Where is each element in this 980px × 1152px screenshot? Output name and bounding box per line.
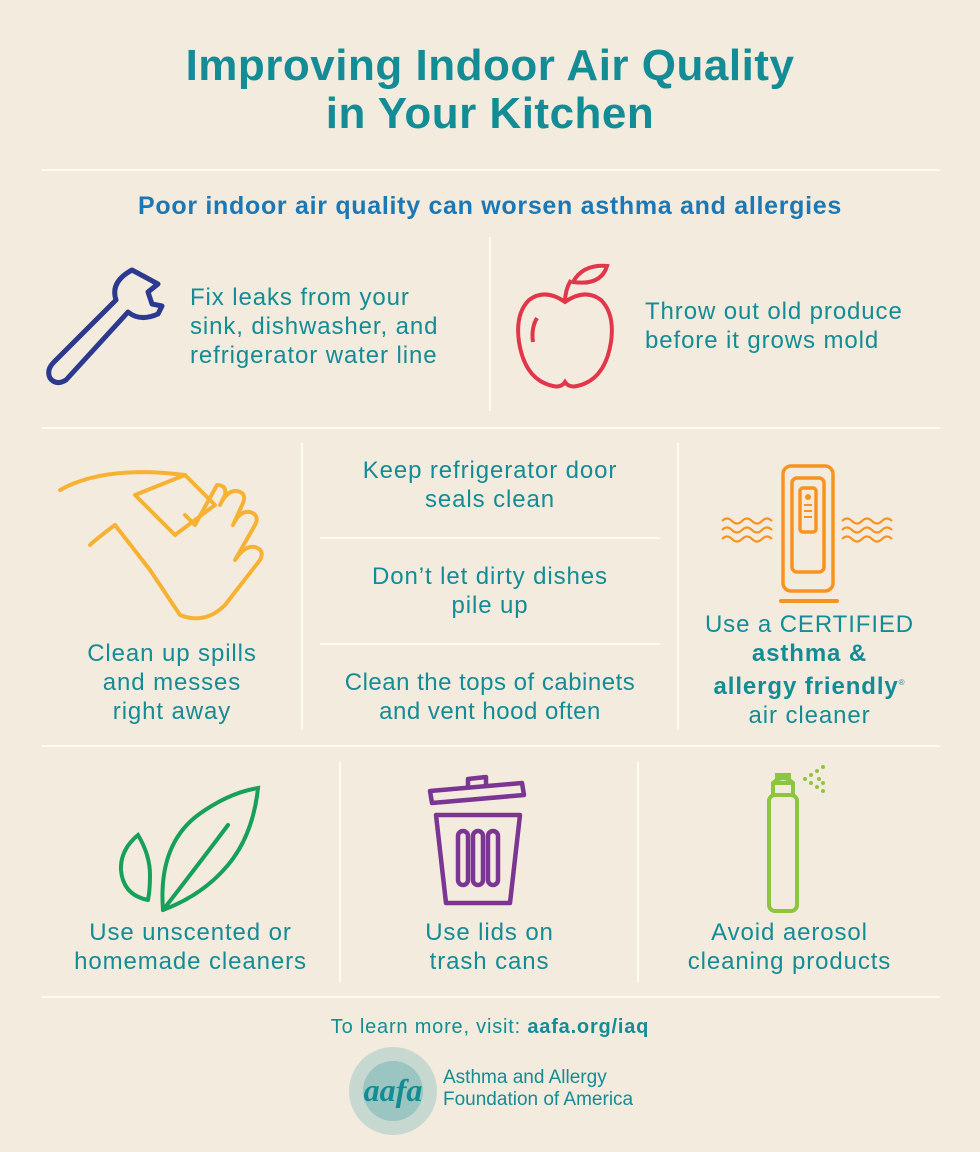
text: fix leaks: [190, 284, 438, 369]
text: trash: Use lids on: [425, 919, 554, 946]
text: produce: Throw out old produce: [645, 298, 903, 325]
text: fix leaks: Fix leaks from your: [190, 284, 410, 311]
text: produce: before it grows mold: [645, 327, 879, 354]
icon: leaf: [118, 786, 260, 912]
text: cabinets: and vent hood often: [379, 698, 601, 725]
logo text: [443, 1067, 634, 1110]
text: aerosol: Avoid aerosol: [711, 919, 868, 946]
text: dishes: [372, 563, 608, 619]
text: fix leaks: refrigerator water line: [190, 342, 437, 369]
text: produce: [645, 298, 903, 354]
text: air cleaner: allergy friendly®: [714, 673, 905, 700]
text: cabinets: Clean the tops of cabinets: [345, 669, 635, 696]
text: door seals: [363, 457, 617, 513]
text: air cleaner: [705, 611, 914, 729]
text: spills: and messes: [103, 669, 241, 696]
text: trash: trash cans: [430, 948, 549, 975]
logo: [349, 1047, 634, 1135]
logo mark: aafa: [364, 1072, 422, 1108]
text: aerosol: cleaning products: [688, 948, 891, 975]
text: fix leaks: sink, dishwasher, and: [190, 313, 438, 340]
icon: aerosol: [767, 765, 825, 913]
icon: hand: [58, 470, 264, 620]
title: [186, 41, 794, 138]
logo mark: [349, 1047, 437, 1135]
text: door seals: Keep refrigerator door: [363, 457, 617, 484]
text: cleaners: Use unscented or: [89, 919, 292, 946]
icon: trash can: [428, 774, 526, 906]
title: in Your Kitchen: [326, 89, 654, 138]
text: air cleaner: Use a CERTIFIED: [705, 611, 914, 638]
text: spills: Clean up spills: [87, 640, 257, 667]
footer link: To learn more, visit: aafa.org/iaq: [331, 1016, 649, 1038]
text: dishes: Don’t let dirty dishes: [372, 563, 608, 590]
text: cabinets: [345, 669, 635, 725]
title: Improving Indoor Air Quality: [186, 41, 794, 90]
icon: apple: [516, 264, 614, 388]
icon: wrench: [46, 268, 164, 386]
icon: air cleaner: [721, 464, 893, 603]
text: spills: right away: [113, 698, 231, 725]
text: trash: [425, 919, 554, 975]
text: cleaners: homemade cleaners: [74, 948, 307, 975]
text: cleaners: [74, 919, 307, 975]
text: air cleaner: air cleaner: [749, 702, 870, 729]
logo text: Foundation of America: [443, 1089, 633, 1110]
text: air cleaner: asthma &: [752, 640, 867, 667]
text: aerosol: [688, 919, 891, 975]
subtitle: Poor indoor air quality can worsen asthma and allergies: [138, 192, 842, 220]
text: door seals: seals clean: [425, 486, 555, 513]
text: spills: [87, 640, 257, 725]
logo text: Asthma and Allergy: [443, 1067, 607, 1088]
text: dishes: pile up: [451, 592, 529, 619]
